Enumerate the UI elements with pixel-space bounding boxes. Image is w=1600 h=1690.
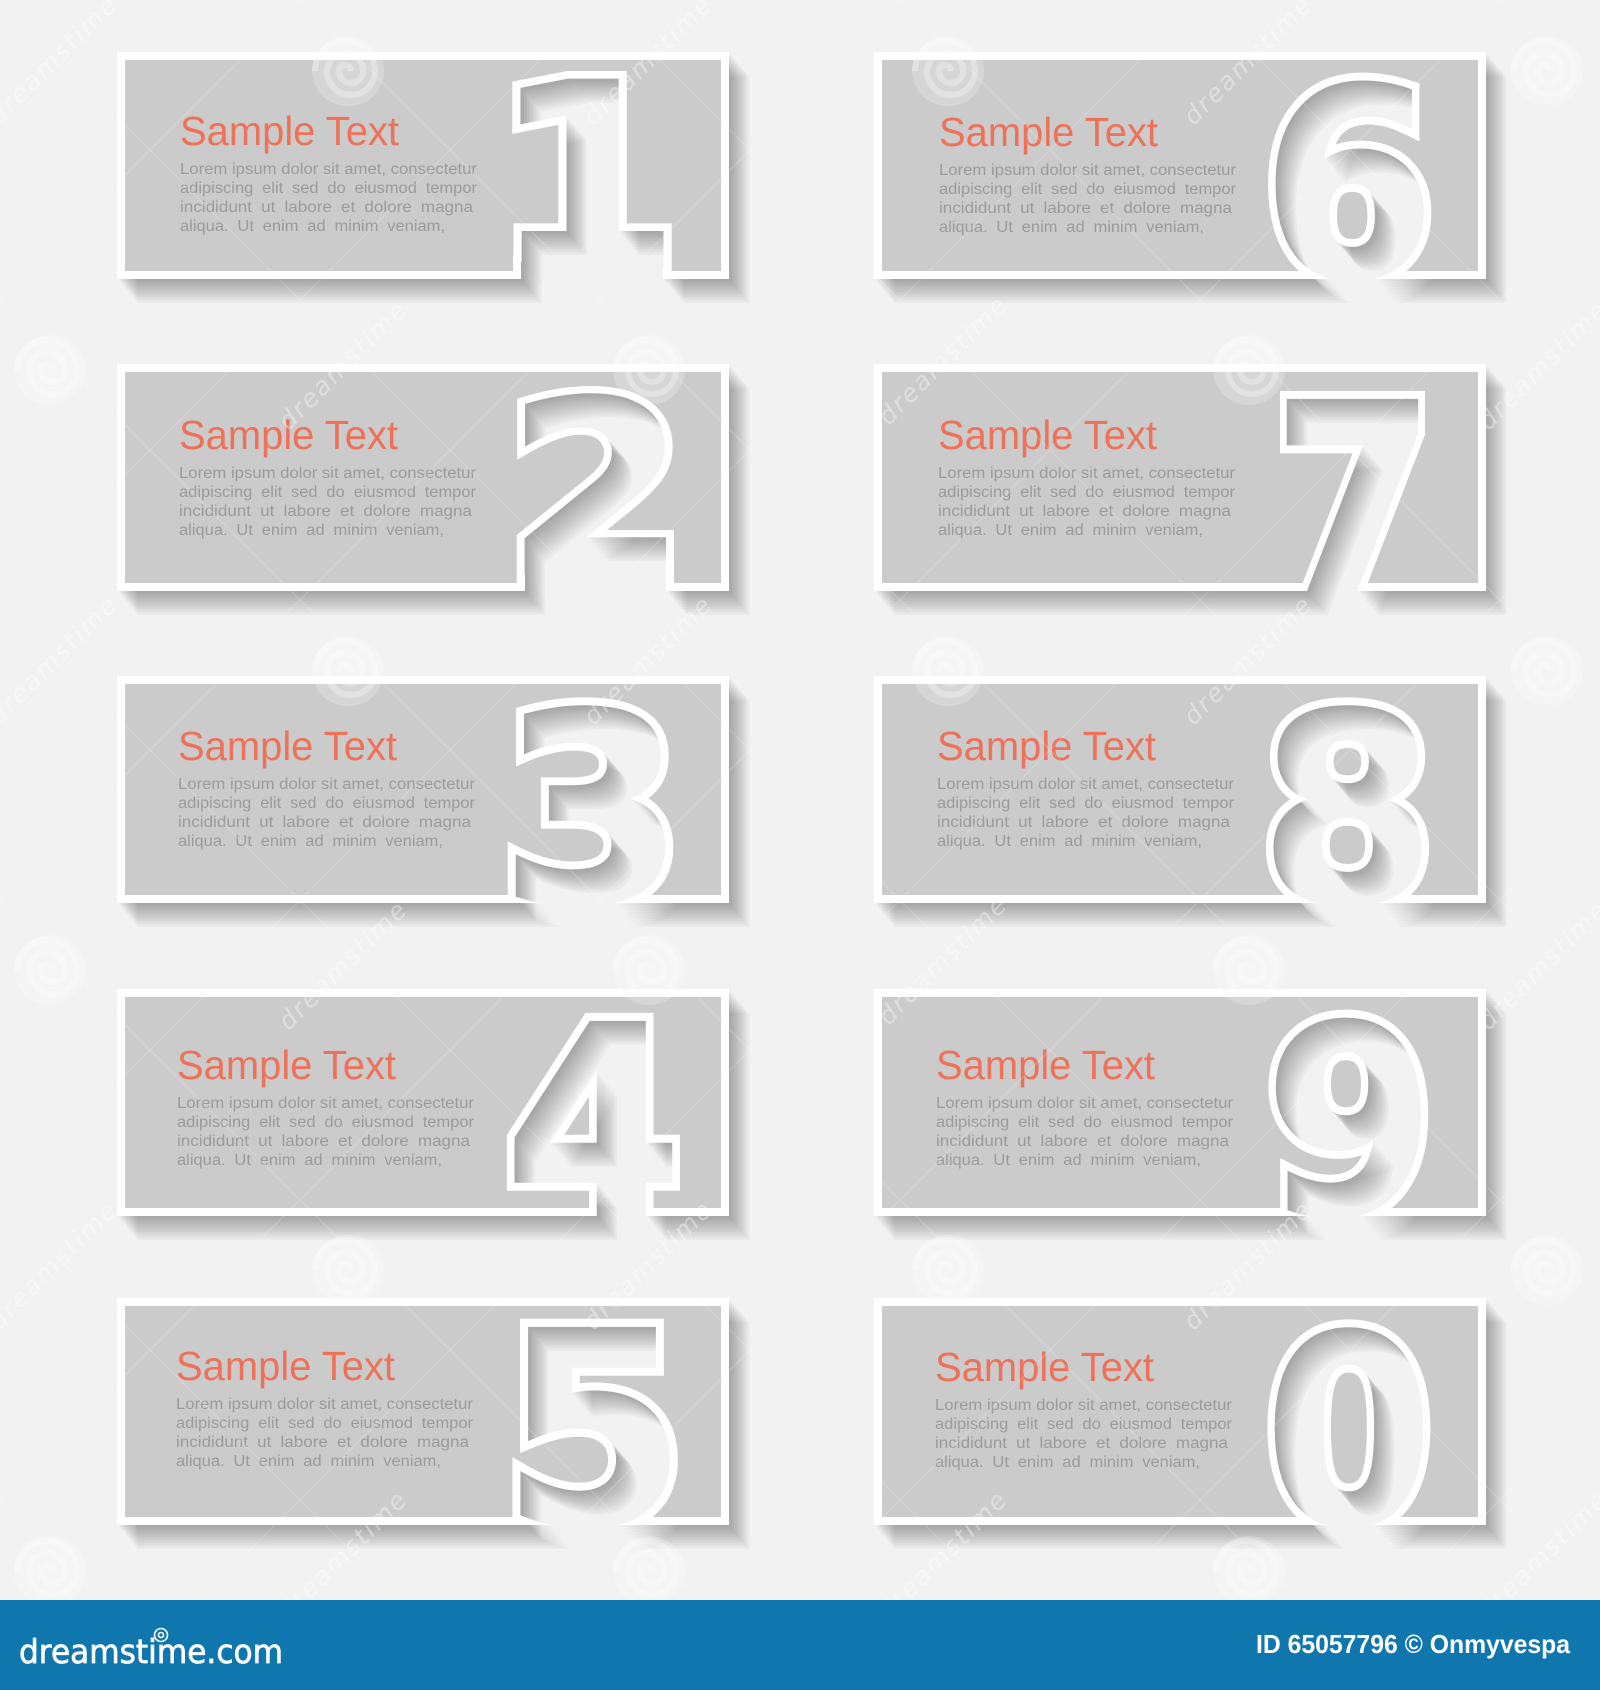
panel 3 long shadow [117, 676, 729, 903]
panel 9 white frame [874, 989, 1486, 1216]
panel 5 body text: aliqua. Ut enim ad minim veniam, [176, 1453, 441, 1470]
watermark overlay: dreamstime [272, 894, 414, 1036]
panel 6 heading: Sample Text [939, 109, 1159, 155]
watermark overlay: dreamstime [872, 889, 1014, 1031]
panel 5 body text: adipiscing elit sed do eiusmod tempor [176, 1415, 473, 1432]
panel 1 body text: adipiscing elit sed do eiusmod tempor [180, 180, 477, 197]
panel 6 body text: incididunt ut labore et dolore magna [939, 200, 1232, 217]
numeral 5: 5 [502, 1275, 686, 1586]
panel 5 heading: Sample Text [176, 1343, 396, 1389]
panel 2 heading: Sample Text [179, 412, 399, 458]
panel 5 body text: Lorem ipsum dolor sit amet, consectetur [176, 1396, 473, 1413]
panel 9 grey fill [882, 997, 1478, 1208]
panel 1 [117, 52, 748, 301]
panel 2 body text [179, 465, 476, 539]
panel 5 body text [176, 1396, 473, 1470]
panel 3 body text: Lorem ipsum dolor sit amet, consectetur [178, 776, 475, 793]
panel 3 body text: adipiscing elit sed do eiusmod tempor [178, 795, 475, 812]
footer banner [0, 1600, 1600, 1690]
numeral 8: 8 [1260, 660, 1435, 963]
panel 2 body text: Lorem ipsum dolor sit amet, consectetur [179, 465, 476, 482]
panel 1 heading: Sample Text [180, 108, 400, 154]
panel 5 grey fill [125, 1306, 721, 1517]
panel 10 heading: Sample Text [935, 1344, 1155, 1390]
panel 2 [117, 351, 729, 628]
panel 4 long shadow [117, 989, 729, 1216]
watermark overlay: dreamstime [872, 1484, 1014, 1626]
panel 6 body text: aliqua. Ut enim ad minim veniam, [939, 219, 1204, 236]
panel 4 body text: adipiscing elit sed do eiusmod tempor [177, 1114, 474, 1131]
panel 2 grey fill [125, 372, 721, 583]
brand logo text: dreamstime.com [19, 1632, 283, 1671]
panel 10 body text: aliqua. Ut enim ad minim veniam, [935, 1454, 1200, 1471]
panel 6 [874, 35, 1486, 338]
panel 6 body text: Lorem ipsum dolor sit amet, consectetur [939, 162, 1236, 179]
watermark overlay: dreamstime [872, 289, 1014, 431]
panel 8 body text: Lorem ipsum dolor sit amet, consectetur [937, 776, 1234, 793]
panel 9 body text: incididunt ut labore et dolore magna [936, 1133, 1229, 1150]
panel 4 heading: Sample Text [177, 1042, 397, 1088]
panel 4 grey fill [125, 997, 721, 1208]
panel 5 white frame [117, 1298, 729, 1525]
watermark overlay: dreamstime [272, 1484, 414, 1626]
panel 3 body text: aliqua. Ut enim ad minim veniam, [178, 833, 443, 850]
panel 8 heading: Sample Text [937, 723, 1157, 769]
panel 4 body text [177, 1095, 474, 1169]
panel 1 grey fill [125, 60, 721, 271]
watermark overlay: dreamstime [272, 294, 414, 436]
panel 8 grey fill [882, 684, 1478, 895]
numeral 2: 2 [506, 351, 687, 628]
panel 7 grey fill [882, 372, 1478, 583]
panel 10 body text [935, 1397, 1232, 1471]
panel 3 [117, 676, 748, 925]
panel 8 long shadow [874, 676, 1486, 903]
numeral 4: 4 [505, 971, 682, 1279]
panel 9 body text [936, 1095, 1233, 1169]
numeral 0: 0 [1265, 1282, 1433, 1585]
panel 4 body text: aliqua. Ut enim ad minim veniam, [177, 1152, 442, 1169]
numeral 6: 6 [1262, 35, 1435, 338]
panel 3 heading: Sample Text [178, 723, 398, 769]
numeral 3: 3 [500, 660, 684, 964]
banner background [0, 1600, 1600, 1690]
panel 5 body text: incididunt ut labore et dolore magna [176, 1434, 469, 1451]
panel 7 body text [938, 465, 1235, 539]
panel 6 white frame [874, 52, 1486, 279]
panel 2 body text: aliqua. Ut enim ad minim veniam, [179, 522, 444, 539]
panel 5 [117, 1298, 748, 1547]
numeral 9: 9 [1265, 971, 1435, 1275]
panel 7 heading: Sample Text [938, 412, 1158, 458]
watermark overlay: dreamstime [577, 589, 719, 731]
watermark overlay: dreamstime [1177, 1194, 1319, 1336]
panel 3 white frame [117, 676, 729, 903]
panel 8 white frame [874, 676, 1486, 903]
panel 6 long shadow [874, 52, 1486, 279]
panel 8 body text: adipiscing elit sed do eiusmod tempor [937, 795, 1234, 812]
panel 4 white frame [117, 989, 729, 1216]
panel 7 body text: incididunt ut labore et dolore magna [938, 503, 1231, 520]
panel 2 body text: incididunt ut labore et dolore magna [179, 503, 472, 520]
icon: logo spiral [154, 1628, 168, 1642]
panel 7 white frame [874, 364, 1486, 591]
panel 7 body text: aliqua. Ut enim ad minim veniam, [938, 522, 1203, 539]
panel 6 grey fill [882, 60, 1478, 271]
panel 7 body text: Lorem ipsum dolor sit amet, consectetur [938, 465, 1235, 482]
numeral 7: 7 [1276, 351, 1432, 660]
panel 6 body text [939, 162, 1236, 236]
panel 1 body text: incididunt ut labore et dolore magna [180, 199, 473, 216]
panel 10 [874, 1282, 1486, 1585]
panel 1 body text [180, 161, 477, 235]
panel 9 body text: aliqua. Ut enim ad minim veniam, [936, 1152, 1201, 1169]
panel 7 [874, 351, 1486, 660]
image id and author: ID 65057796 © Onmyvespa [1256, 1629, 1571, 1659]
panel 9 [874, 971, 1486, 1275]
panel 1 long shadow [117, 52, 729, 279]
panel 9 heading: Sample Text [936, 1042, 1156, 1088]
panel 9 body text: Lorem ipsum dolor sit amet, consectetur [936, 1095, 1233, 1112]
panel 2 long shadow [117, 364, 729, 591]
numeral 1: 1 [492, 30, 680, 326]
panel 4 body text: incididunt ut labore et dolore magna [177, 1133, 470, 1150]
panel 3 grey fill [125, 684, 721, 895]
panel 7 long shadow [874, 364, 1486, 591]
panel 4 body text: Lorem ipsum dolor sit amet, consectetur [177, 1095, 474, 1112]
panel 10 body text: adipiscing elit sed do eiusmod tempor [935, 1416, 1232, 1433]
panel 10 grey fill [882, 1306, 1478, 1517]
panel 1 body text: Lorem ipsum dolor sit amet, consectetur [180, 161, 477, 178]
panel 8 body text [937, 776, 1234, 850]
panel 10 body text: incididunt ut labore et dolore magna [935, 1435, 1228, 1452]
panel 9 body text: adipiscing elit sed do eiusmod tempor [936, 1114, 1233, 1131]
panel 10 white frame [874, 1298, 1486, 1525]
panel 8 body text: aliqua. Ut enim ad minim veniam, [937, 833, 1202, 850]
panel 3 body text: incididunt ut labore et dolore magna [178, 814, 471, 831]
panel 8 body text: incididunt ut labore et dolore magna [937, 814, 1230, 831]
panel 9 long shadow [874, 989, 1486, 1216]
panel 5 long shadow [117, 1298, 729, 1525]
panel 6 body text: adipiscing elit sed do eiusmod tempor [939, 181, 1236, 198]
panel 10 long shadow [874, 1298, 1486, 1525]
panel 3 body text [178, 776, 475, 850]
panel 10 body text: Lorem ipsum dolor sit amet, consectetur [935, 1397, 1232, 1414]
panel 1 body text: aliqua. Ut enim ad minim veniam, [180, 218, 445, 235]
panel 8 [874, 660, 1486, 963]
panel 7 body text: adipiscing elit sed do eiusmod tempor [938, 484, 1235, 501]
watermark overlay: dreamstime [577, 1194, 719, 1336]
panel 2 body text: adipiscing elit sed do eiusmod tempor [179, 484, 476, 501]
panel 4 [117, 989, 748, 1238]
watermark overlay: dreamstime [1177, 589, 1319, 731]
panel 2 white frame [117, 364, 729, 591]
panel 1 white frame [117, 52, 729, 279]
